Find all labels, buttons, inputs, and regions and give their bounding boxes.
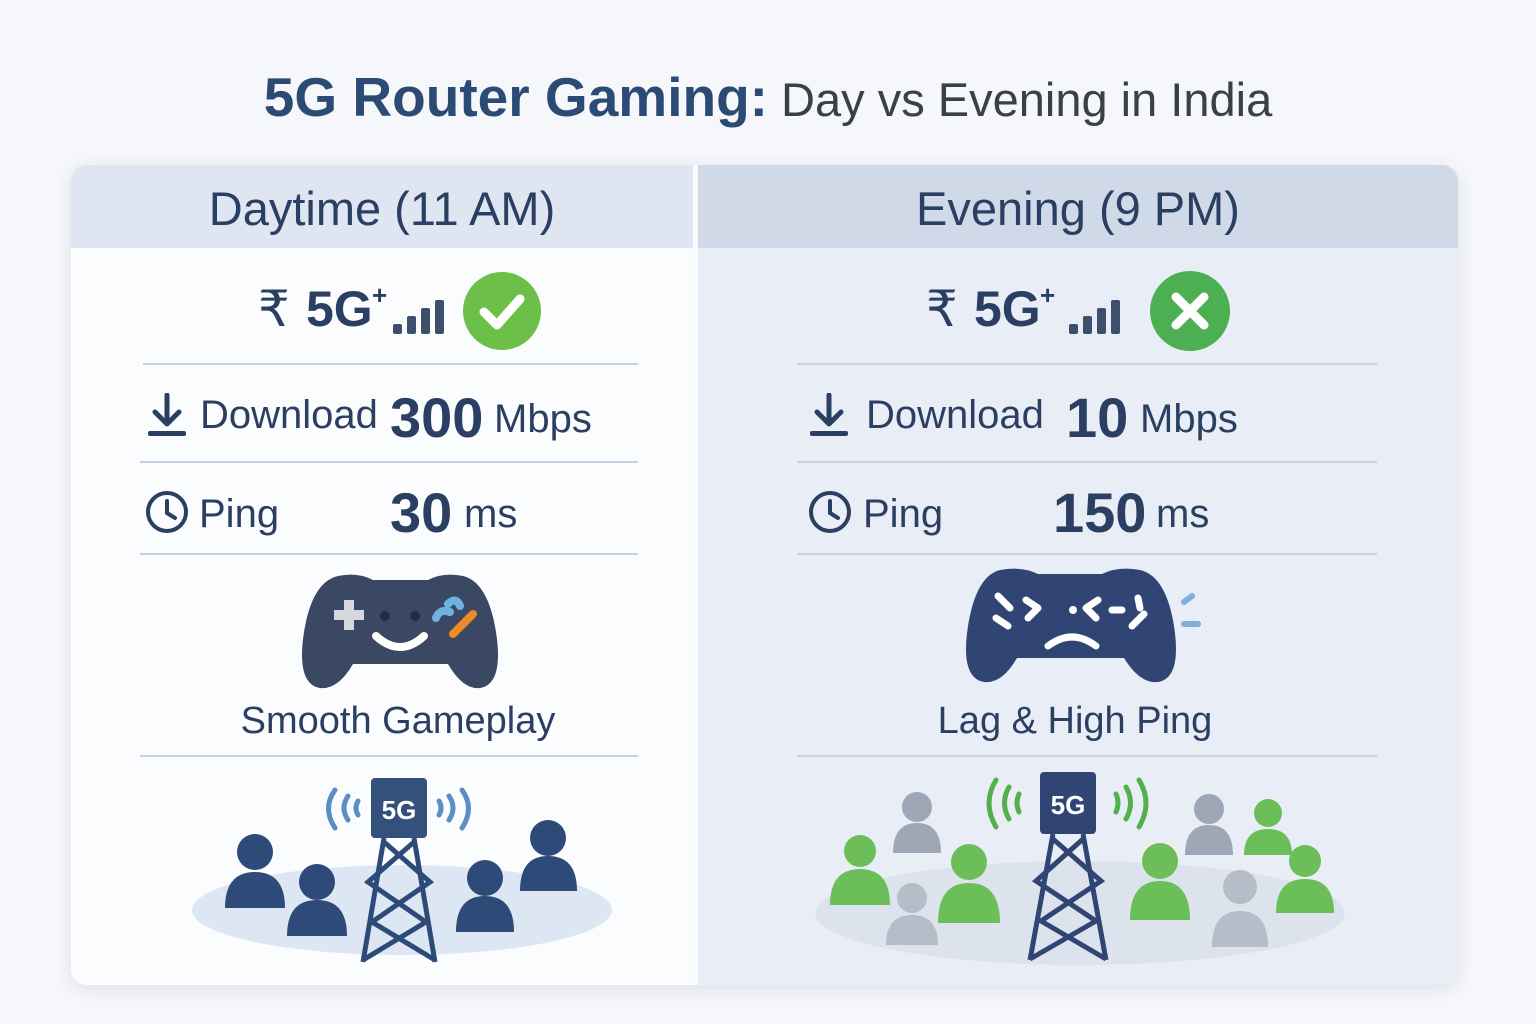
title: 5G Router Gaming: Day vs Evening in India <box>264 66 1272 128</box>
ping row: day: ms <box>464 492 517 536</box>
download row: day: Download <box>200 393 378 437</box>
ping row: day <box>146 481 517 544</box>
download row: evening <box>810 386 1238 449</box>
ping row: evening: 150 <box>1053 481 1146 544</box>
download row: evening: 10 <box>1066 386 1128 449</box>
panel: evening <box>698 165 1458 985</box>
header: evening: Evening (9 PM) <box>916 182 1240 235</box>
label: lag & high ping: Lag & High Ping <box>938 700 1212 742</box>
icon: happy controller <box>302 574 498 688</box>
signal row: day <box>258 272 541 350</box>
download row: day: Mbps <box>494 397 592 441</box>
signal row: evening: + <box>1040 280 1055 310</box>
download row: evening: Mbps <box>1140 397 1238 441</box>
illustration: day tower and users: 5G <box>382 795 416 825</box>
card <box>71 165 1458 985</box>
header: daytime <box>71 165 693 248</box>
illustration: day tower and users <box>192 778 612 962</box>
illustration: evening tower and crowd: 5G <box>1051 790 1085 820</box>
download row: day: 300 <box>390 386 483 449</box>
ping row: evening <box>809 481 1209 544</box>
signal row: day: 5G <box>306 281 373 337</box>
ping row: evening: Ping <box>863 492 943 536</box>
signal row: evening <box>926 271 1230 351</box>
panel: daytime <box>71 165 693 985</box>
signal row: evening: ₹ <box>926 281 958 337</box>
ping row: evening: ms <box>1156 492 1209 536</box>
download row: evening: Download <box>866 393 1044 437</box>
signal row: day: ₹ <box>258 281 290 337</box>
signal row: day: + <box>372 280 387 310</box>
label: smooth gameplay: Smooth Gameplay <box>241 700 555 742</box>
illustration: evening tower and crowd <box>815 772 1345 965</box>
header: evening <box>698 165 1458 248</box>
ping row: day: 30 <box>390 481 452 544</box>
icon: check <box>463 272 541 350</box>
icon: x <box>1150 271 1230 351</box>
ping row: day: Ping <box>199 492 279 536</box>
icon: sad controller <box>966 568 1201 682</box>
download row: day <box>148 386 592 449</box>
header: daytime: Daytime (11 AM) <box>209 182 555 235</box>
signal row: evening: 5G <box>974 281 1041 337</box>
